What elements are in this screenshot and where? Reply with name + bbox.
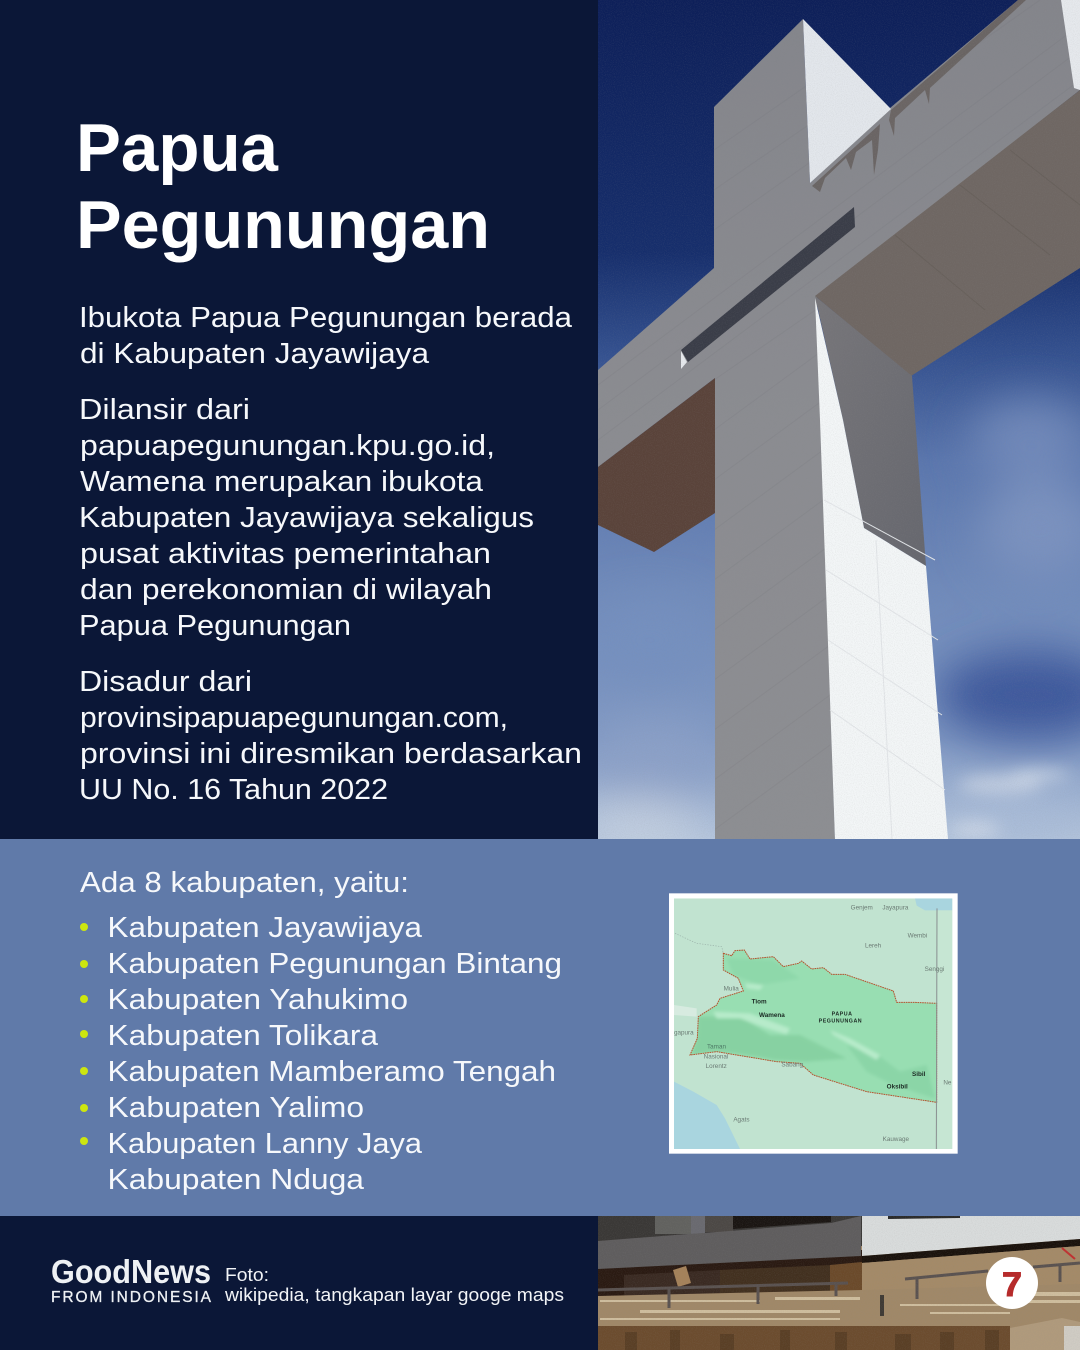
- photo credit: wikipedia, tangkapan layar googe maps: [224, 1285, 564, 1305]
- text block: capital: Ibukota Papua Pegunungan berada: [79, 302, 573, 334]
- cross: arm underside right: [815, 90, 1080, 376]
- background: navy panel: [0, 0, 598, 839]
- map: Papua Pegunungan province: Wembi: [908, 933, 927, 940]
- map: Papua Pegunungan province: Kauwage: [883, 1136, 910, 1143]
- text block: Wamena: Dilansir dari: [79, 394, 250, 426]
- map: Papua Pegunungan province: [669, 893, 958, 1154]
- list: kabupaten: [80, 912, 562, 1196]
- page number badge: 7: [1002, 1266, 1022, 1304]
- text block: Wamena: Papua Pegunungan: [79, 610, 351, 642]
- footer panel: [0, 1216, 598, 1350]
- text block: Wamena: pusat aktivitas pemerintahan: [80, 538, 491, 570]
- text block: Wamena: papuapegunungan.kpu.go.id,: [80, 430, 495, 462]
- province shape: [690, 950, 937, 1102]
- list: kabupaten: Kabupaten Yahukimo: [108, 984, 408, 1016]
- text block: legal basis: Disadur dari: [79, 666, 252, 698]
- heading: kabupaten list: Ada 8 kabupaten, yaitu:: [80, 867, 409, 899]
- map: Papua Pegunungan province: Mulia: [724, 986, 739, 993]
- map: Papua Pegunungan province: PEGUNUNGAN: [819, 1019, 862, 1025]
- title: [76, 110, 490, 263]
- map: Papua Pegunungan province: Taman: [707, 1044, 726, 1051]
- text block: Wamena: Wamena merupakan ibukota: [80, 466, 484, 498]
- map: Papua Pegunungan province: Sabang: [781, 1061, 804, 1068]
- map: Papua Pegunungan province: Nasional: [704, 1053, 728, 1060]
- list: kabupaten: Kabupaten Nduga: [108, 1164, 365, 1196]
- cross: white top triangle: [803, 19, 891, 183]
- map: Papua Pegunungan province: Lereh: [865, 942, 882, 949]
- cross: sunlit side of column: [815, 298, 948, 839]
- cross: top right white face: [1061, 0, 1080, 90]
- map: Papua Pegunungan province: Agats: [733, 1117, 750, 1124]
- text block: capital: [79, 302, 573, 370]
- photo credit: [224, 1265, 564, 1305]
- text block: Wamena: [79, 394, 534, 642]
- map: Papua Pegunungan province: Genjem: [851, 904, 873, 911]
- map: Papua Pegunungan province: Oksibil: [887, 1084, 908, 1091]
- list: kabupaten: Kabupaten Jayawijaya: [108, 912, 423, 944]
- map: Papua Pegunungan province: gapura: [674, 1030, 694, 1037]
- map: Papua Pegunungan province: Lorentz: [706, 1063, 727, 1070]
- map: Papua Pegunungan province: Ne: [943, 1079, 952, 1086]
- map: Papua Pegunungan province: Tiom: [752, 998, 767, 1005]
- list: kabupaten: Kabupaten Pegunungan Bintang: [108, 948, 562, 980]
- cross: window slit: [681, 207, 855, 362]
- rust stains: [812, 0, 1026, 192]
- list: kabupaten: Kabupaten Tolikara: [108, 1020, 379, 1052]
- text block: legal basis: [79, 666, 582, 806]
- photo: white cross monument against the sky: [580, 0, 1080, 850]
- cross: grey front face: [598, 0, 1080, 839]
- text block: Wamena: Kabupaten Jayawijaya sekaligus: [79, 502, 534, 534]
- map: Papua Pegunungan province: Senggi: [925, 966, 944, 973]
- logo: GoodNews from Indonesia: FROM INDONESIA: [51, 1289, 212, 1306]
- map: Papua Pegunungan province: PAPUA: [832, 1011, 852, 1017]
- text block: capital: di Kabupaten Jayawijaya: [80, 338, 430, 370]
- text block: legal basis: provinsipapuapegunungan.com,: [80, 702, 508, 734]
- map: Papua Pegunungan province: Sibil: [912, 1071, 926, 1078]
- cross: arm underside left: [598, 378, 715, 552]
- cross: shaded side of column: [815, 296, 926, 566]
- page number badge: [986, 1257, 1038, 1309]
- text block: Wamena: dan perekonomian di wilayah: [80, 574, 492, 606]
- logo: GoodNews from Indonesia: GoodNews: [51, 1253, 211, 1290]
- photo: base of monument: [598, 1216, 1080, 1350]
- map: Papua Pegunungan province: Jayapura: [882, 904, 909, 911]
- map: Papua Pegunungan province: Wamena: [759, 1012, 785, 1019]
- title: Papua: [76, 110, 279, 186]
- text block: legal basis: UU No. 16 Tahun 2022: [79, 774, 388, 806]
- list: kabupaten: Kabupaten Lanny Jaya: [108, 1128, 423, 1160]
- list: kabupaten: Kabupaten Yalimo: [108, 1092, 364, 1124]
- logo: GoodNews from Indonesia: [51, 1253, 212, 1306]
- photo credit: Foto:: [225, 1265, 269, 1285]
- title: Pegunungan: [76, 187, 490, 263]
- list: kabupaten: Kabupaten Mamberamo Tengah: [108, 1056, 556, 1088]
- text block: legal basis: provinsi ini diresmikan berdasarkan: [80, 738, 582, 770]
- panel: kabupaten band: [0, 839, 1080, 1216]
- photo grain: [598, 0, 1080, 1350]
